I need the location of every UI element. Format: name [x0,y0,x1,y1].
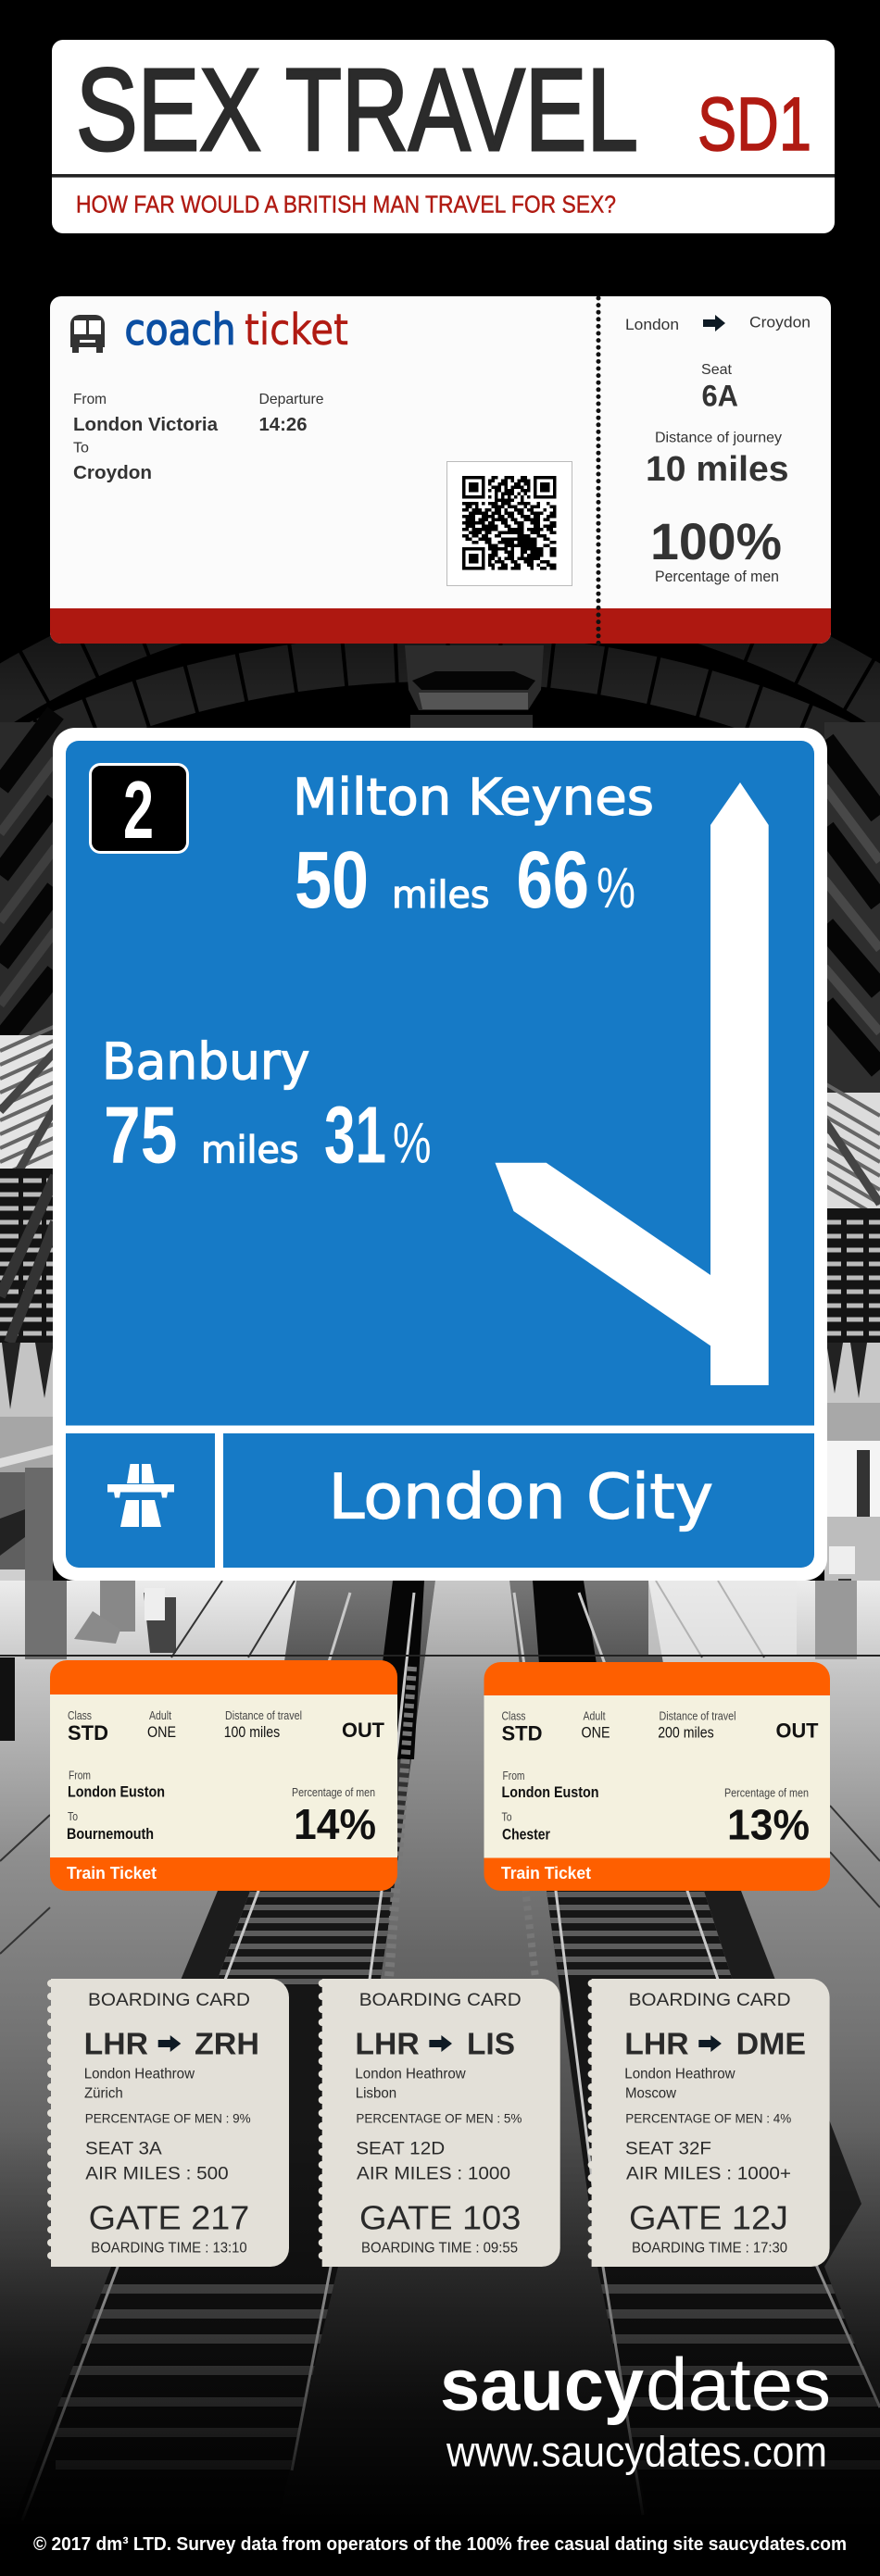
panel: boarding card Zurich: SEAT 3A [85,2140,162,2159]
panel: train ticket Chester: 13% [727,1801,810,1849]
panel: boarding card Lisbon [322,1979,560,2267]
icon: bus [70,315,105,353]
ballast beside the tickets [389,1667,412,1978]
panel: boarding card Lisbon: BOARDING TIME : 09:55 [361,2241,518,2257]
panel: boarding card Zurich: LHR [84,2027,148,2061]
panel: train ticket Chester: To [502,1810,511,1824]
panel: train ticket Chester: OUT [776,1719,819,1743]
panel: train ticket Bournemouth: Percentage of men [292,1785,375,1799]
subtitle: HOW FAR WOULD A BRITISH MAN TRAVEL FOR SEX? [76,191,616,219]
journey details: London Victoria [73,415,219,435]
destination: Banbury: miles [201,1130,298,1172]
icon: motorway [107,1464,174,1527]
junction number badge: 2 [123,764,154,856]
panel: boarding card Zurich: ZRH [195,2027,259,2061]
panel: boarding card Lisbon: Lisbon [356,2086,396,2102]
arch roof rings [0,574,880,1833]
journey details [73,392,324,483]
panel: train ticket Bournemouth: Bournemouth [67,1825,154,1843]
destination: Banbury [102,1032,432,1180]
stub: route: Croydon [749,313,811,331]
panel: train ticket Chester: STD [502,1722,543,1745]
panel: boarding card Zurich: GATE 217 [89,2199,249,2237]
panel: boarding card Moscow: BOARDING TIME : 17:30 [632,2241,787,2257]
panel: train ticket Chester: Chester [502,1826,550,1844]
panel: train ticket Chester: ONE [582,1724,610,1742]
QR code [446,461,572,585]
panel: boarding card Moscow: LHR [624,2027,689,2061]
panel: boarding card Zurich: London Heathrow [84,2067,195,2082]
panel: boarding card Moscow: GATE 12J [629,2199,788,2237]
destination: Milton Keynes: Milton Keynes [293,769,654,826]
panel: train ticket Chester [484,1662,830,1891]
journey details: From [73,392,107,407]
panel: train ticket Bournemouth: To [68,1809,78,1823]
panel: train ticket Bournemouth: London Euston [68,1783,165,1800]
destination: Banbury: % [393,1111,432,1176]
panel: train ticket Bournemouth: OUT [342,1719,385,1742]
panel: boarding card Lisbon: AIR MILES : 1000 [357,2164,510,2183]
destination: Banbury: 31 [324,1091,386,1180]
journey details: Departure [259,392,324,407]
copyright footer: © 2017 dm³ LTD. Survey data from operators of the 100% free casual dating site saucydates.com [33,2534,847,2555]
stub: route: London [625,316,679,333]
stub: seat [701,362,738,413]
website url: www.saucydates.com [446,2428,827,2476]
right roof panels [824,722,880,1097]
panel: boarding card Moscow: AIR MILES : 1000+ [626,2164,791,2183]
panel: boarding card Lisbon: LIS [467,2027,515,2061]
destination: Milton Keynes: miles [392,874,489,917]
panel: boarding card Lisbon: London Heathrow [355,2067,466,2082]
destination: Milton Keynes: 50 [295,835,369,925]
stub: seat: Seat [701,362,733,378]
stub: route [625,313,811,333]
panel: boarding card Zurich: PERCENTAGE OF MEN : 9% [85,2110,251,2125]
panel: train ticket Bournemouth: ONE [147,1723,176,1741]
panel: train ticket Chester: Adult [584,1709,606,1723]
destination: Milton Keynes: 66 [517,835,589,925]
background: station photo [0,636,880,2515]
panel: train ticket Chester: Class [502,1709,526,1723]
journey details: Croydon [73,463,152,483]
destination: Milton Keynes [293,769,654,925]
coach ticket logo [124,305,348,355]
panel: train ticket Chester: From [502,1769,524,1782]
left roof panels [0,722,56,1037]
panel: boarding card Moscow: London Heathrow [624,2067,735,2082]
stub: distance: 10 miles [646,450,789,489]
panel: train ticket Bournemouth: Adult [149,1708,171,1722]
panel: train ticket Chester: Percentage of men [724,1786,809,1800]
stub: distance [646,430,789,489]
panel: train ticket Bournemouth: Distance of travel [225,1708,302,1722]
rails [22,1593,880,2520]
panel: boarding card Moscow: SEAT 32F [625,2140,711,2159]
panel: coach ticket [50,296,831,644]
stub: distance: Distance of journey [655,430,782,446]
platforms and track beds [0,1581,880,2576]
panel: boarding card Lisbon: SEAT 12D [356,2140,445,2159]
panel: boarding card Zurich: BOARDING TIME : 13:10 [91,2241,247,2257]
stub: percentage: 100% [650,512,782,570]
junction number badge [91,764,187,856]
destination: London City: London City [328,1461,713,1533]
panel: train ticket Chester: Distance of travel [660,1709,736,1723]
logo: saucydates: saucy [440,2343,644,2426]
upper track centre black [371,1581,424,1759]
panel: boarding card Zurich: AIR MILES : 500 [85,2164,229,2183]
platform details [25,1581,67,1659]
panel: boarding card Moscow [592,1979,830,2267]
destination: Milton Keynes: % [597,857,635,920]
panel: boarding card Zurich: BOARDING CARD [88,1991,250,2010]
panel: train ticket Chester: 200 miles [658,1724,714,1742]
panel: boarding card Moscow: Moscow [625,2086,677,2102]
panel: boarding card Lisbon: PERCENTAGE OF MEN : 5% [356,2110,522,2125]
panel: boarding card Zurich [51,1979,289,2267]
panel: boarding card Moscow: PERCENTAGE OF MEN : 4% [625,2110,791,2125]
destination: Banbury: Banbury [102,1032,309,1091]
journey details: To [73,441,89,456]
panel: boarding card Zurich: Zürich [84,2086,123,2102]
panel: boarding card Lisbon: LHR [355,2027,420,2061]
panel: train ticket Bournemouth: 100 miles [224,1723,280,1741]
panel: boarding card Moscow: BOARDING CARD [629,1991,791,2010]
arrow: route split [495,782,769,1385]
stub: seat: 6A [702,380,738,413]
panel: boarding card Lisbon: BOARDING CARD [359,1991,522,2010]
panel: title sign [52,40,835,233]
panel: train ticket Bournemouth [50,1660,397,1891]
logo: saucydates: dates [646,2343,831,2426]
coach ticket logo: coach [124,305,235,355]
postcode: SD1 [698,82,811,167]
panel: train ticket Bournemouth: Train Ticket [67,1864,157,1882]
panel: train ticket Bournemouth: 14% [294,1800,376,1848]
journey details: 14:26 [259,415,308,435]
destination: Banbury: 75 [104,1091,178,1180]
sleepers [56,1894,408,2465]
roof centre fitting [405,645,544,710]
panel: train ticket Chester: London Euston [502,1783,598,1801]
panel: boarding card Moscow: DME [736,2027,806,2061]
panel: train ticket Bournemouth: From [69,1769,91,1782]
title: SEX TRAVEL [76,44,638,175]
stub: percentage: Percentage of men [655,568,779,585]
panel: train ticket Bournemouth: Class [68,1708,92,1722]
panel: train ticket Bournemouth: STD [68,1721,108,1744]
panel: boarding card Lisbon: GATE 103 [359,2199,521,2237]
coach ticket logo: ticket [245,305,348,355]
panel: motorway sign [53,728,827,1581]
logo: saucydates [440,2343,831,2426]
panel: train ticket Chester: Train Ticket [501,1864,591,1882]
